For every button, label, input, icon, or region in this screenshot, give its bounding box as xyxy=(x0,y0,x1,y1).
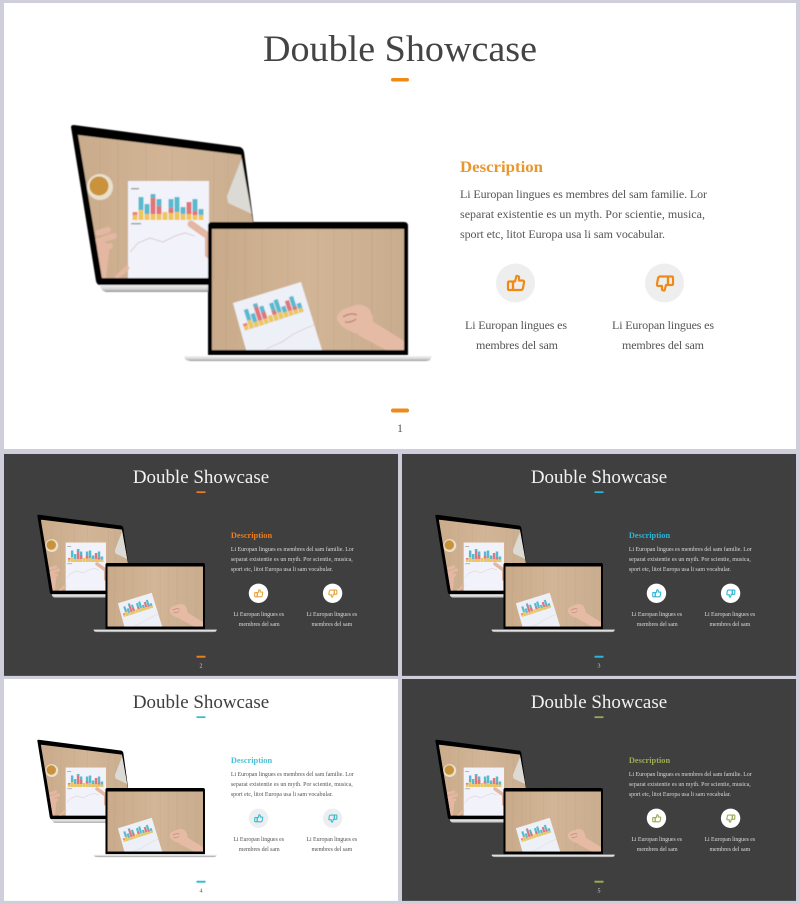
caption left: membres del sam xyxy=(637,847,678,853)
panel: slide 1 white xyxy=(4,3,796,449)
caption left: membres del sam xyxy=(637,622,678,628)
caption left: Li Europan lingues es xyxy=(233,837,285,843)
description heading: Description xyxy=(460,159,543,176)
footer accent bar xyxy=(391,408,409,412)
page number: 4 xyxy=(200,888,203,894)
icon: thumbs up xyxy=(647,809,666,828)
description heading: Description xyxy=(629,756,671,765)
description text: sport etc, litot Europa usa li sam vocabular. xyxy=(629,567,731,573)
caption left xyxy=(233,612,285,628)
icon: thumbs up xyxy=(647,584,666,603)
caption right xyxy=(704,837,756,853)
caption left: membres del sam xyxy=(239,847,280,853)
laptop showcase image xyxy=(37,740,217,857)
description text: separat existentie es un myth. Por scientie, musica, xyxy=(231,557,353,563)
page number: 1 xyxy=(397,421,403,435)
footer accent bar xyxy=(595,656,603,658)
caption right: Li Europan lingues es xyxy=(704,837,756,843)
description text xyxy=(629,546,752,573)
caption right xyxy=(306,837,358,853)
title: Double Showcase xyxy=(531,467,667,488)
caption right: membres del sam xyxy=(311,622,353,628)
caption left xyxy=(631,837,683,853)
icon: thumbs down xyxy=(323,809,342,828)
description heading: Description xyxy=(231,756,273,765)
description text: sport etc, litot Europa usa li sam vocabular. xyxy=(629,792,731,798)
page number: 3 xyxy=(598,663,601,669)
caption right: membres del sam xyxy=(709,622,751,628)
footer accent bar xyxy=(197,656,205,658)
title accent bar xyxy=(197,491,205,493)
laptop showcase image xyxy=(435,515,615,632)
caption left xyxy=(465,318,567,352)
caption left: Li Europan lingues es xyxy=(631,837,683,843)
icon: thumbs up xyxy=(249,584,268,603)
footer accent bar xyxy=(595,881,603,883)
description text: Li Europan lingues es membres del sam familie. Lor xyxy=(231,546,354,553)
title accent bar xyxy=(595,716,603,718)
caption right xyxy=(704,612,756,628)
description text xyxy=(460,187,707,241)
description text xyxy=(231,771,354,798)
icon: thumbs up xyxy=(249,809,268,828)
page number: 2 xyxy=(200,663,203,669)
description text: Li Europan lingues es membres del sam familie. Lor xyxy=(460,187,707,201)
title: Double Showcase xyxy=(133,692,269,713)
description text: separat existentie es un myth. Por scientie, musica, xyxy=(629,782,751,788)
laptop showcase image xyxy=(435,740,615,857)
icon: thumbs down xyxy=(721,809,740,828)
description text xyxy=(231,546,354,573)
caption right: membres del sam xyxy=(311,847,353,853)
description text: Li Europan lingues es membres del sam familie. Lor xyxy=(629,546,752,553)
title accent bar xyxy=(595,491,603,493)
description text xyxy=(629,771,752,798)
icon: thumbs down xyxy=(721,584,740,603)
caption right: Li Europan lingues es xyxy=(704,612,756,618)
title: Double Showcase xyxy=(531,692,667,713)
caption left xyxy=(233,837,285,853)
icon: thumbs up xyxy=(496,264,535,302)
caption right: Li Europan lingues es xyxy=(306,612,358,618)
caption left xyxy=(631,612,683,628)
description heading: Description xyxy=(231,531,273,540)
description text: separat existentie es un myth. Por scientie, musica, xyxy=(629,557,751,563)
description heading: Description xyxy=(629,531,671,540)
caption right: membres del sam xyxy=(709,847,751,853)
caption right xyxy=(612,318,714,352)
icon: thumbs down xyxy=(323,584,342,603)
description text: Li Europan lingues es membres del sam familie. Lor xyxy=(231,771,354,778)
panel: slide 5 dark green xyxy=(402,679,796,901)
page number: 5 xyxy=(598,888,601,894)
caption left: Li Europan lingues es xyxy=(631,612,683,618)
footer accent bar xyxy=(197,881,205,883)
caption right: Li Europan lingues es xyxy=(306,837,358,843)
panel: slide 4 white blue xyxy=(4,679,398,901)
description text: sport etc, litot Europa usa li sam vocabular. xyxy=(231,792,333,798)
description text: separat existentie es un myth. Por scientie, musica, xyxy=(460,207,705,221)
icon: thumbs down xyxy=(645,264,684,302)
description text: sport etc, litot Europa usa li sam vocabular. xyxy=(231,567,333,573)
title accent bar xyxy=(391,78,409,82)
caption left: Li Europan lingues es xyxy=(233,612,285,618)
caption right: membres del sam xyxy=(622,338,705,352)
description text: Li Europan lingues es membres del sam familie. Lor xyxy=(629,771,752,778)
caption left: Li Europan lingues es xyxy=(465,318,567,332)
caption right xyxy=(306,612,358,628)
caption left: membres del sam xyxy=(476,338,559,352)
title: Double Showcase xyxy=(263,29,537,70)
caption right: Li Europan lingues es xyxy=(612,318,714,332)
panel: slide 2 dark orange xyxy=(4,454,398,676)
panel: slide 3 dark blue xyxy=(402,454,796,676)
title accent bar xyxy=(197,716,205,718)
description text: sport etc, litot Europa usa li sam vocabular. xyxy=(460,227,665,241)
title: Double Showcase xyxy=(133,467,269,488)
laptop showcase image xyxy=(70,125,432,361)
caption left: membres del sam xyxy=(239,622,280,628)
description text: separat existentie es un myth. Por scientie, musica, xyxy=(231,782,353,788)
laptop showcase image xyxy=(37,515,217,632)
